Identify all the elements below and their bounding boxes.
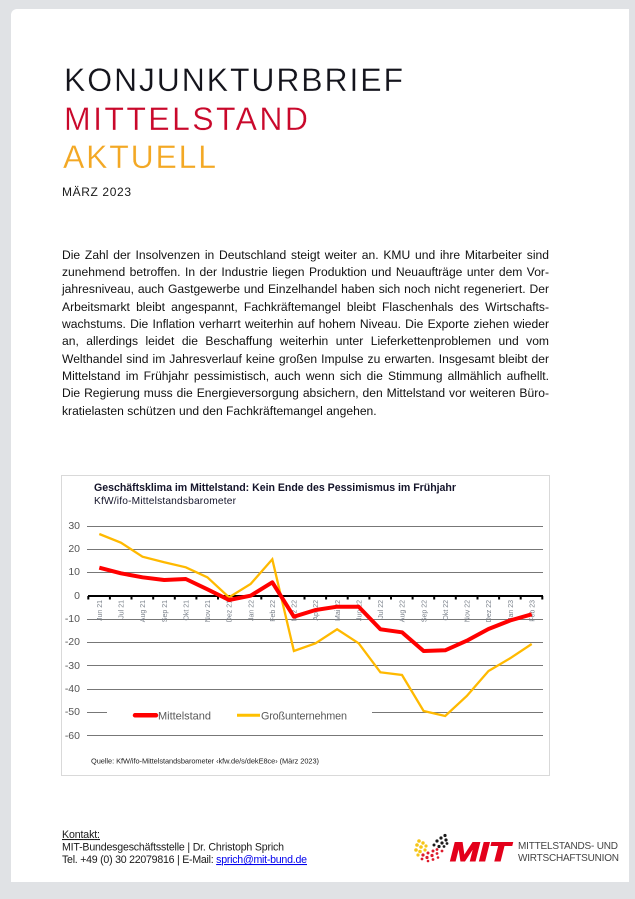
text block: summary: Mittelstand im Frühjahr pessimistisch, auch wenn sich die Stimmung allmählich aufhellt. <box>62 369 549 383</box>
x axis month labels <box>97 600 536 622</box>
text block: summary: Welthandel sind im Jahresverlauf keine großen Impulse zu erwarten. Insgesamt bleibt der <box>62 352 549 366</box>
y axis labels: 20 <box>68 543 80 555</box>
x axis month labels: Nov 21 <box>205 600 212 622</box>
title line: Aktuell: AKTUELL <box>63 139 216 175</box>
x axis month labels: Jan 23 <box>508 600 515 621</box>
y axis labels: 0 <box>74 590 80 602</box>
icon: dots arc <box>414 834 448 862</box>
text block: summary: kratielasten schützen und den Fachkräftemangel angehen. <box>62 404 377 418</box>
legend label: Großunternehmen: Großunternehmen <box>261 710 347 722</box>
x axis month labels: Mrz 22 <box>292 600 299 621</box>
x axis month labels: Jul 22 <box>378 600 385 619</box>
x axis month labels: Aug 21 <box>140 600 147 622</box>
text block: summary <box>62 248 549 418</box>
contact phone and email: Tel. +49 (0) 30 22079816 | E-Mail: sprich@mit-bund.de <box>62 854 307 866</box>
text block: summary: wachstums. Die Inflation verharrt weiterhin auf hohem Niveau. Die Exporte ziehen wieder <box>62 317 549 331</box>
x axis month labels: Okt 21 <box>184 600 190 621</box>
x axis month labels: Mai 22 <box>335 600 342 621</box>
y axis labels <box>65 520 80 742</box>
text block: summary: Arbeitsmarkt bleibt angespannt, Fachkräftemangel bleibt Flaschenhals des Wirtschafts- <box>62 300 549 314</box>
text block: summary: Die Zahl der Insolvenzen in Deutschland steigt weiter an. KMU und ihre Mitarbeiter sind <box>62 248 549 262</box>
y axis labels: -10 <box>65 613 80 625</box>
y axis labels: -40 <box>65 683 80 695</box>
logo wordmark: MIT <box>450 837 513 867</box>
chart title: Geschäftsklima im Mittelstand: Kein Ende des Pessimismus im Frühjahr <box>94 482 456 494</box>
legend key: Großunternehmen <box>237 714 260 717</box>
title line: Konjunkturbrief: KONJUNKTURBRIEF <box>64 62 403 98</box>
chart subtitle: KfW/ifo-Mittelstandsbarometer <box>94 496 237 507</box>
x axis month labels: Sep 22 <box>421 600 428 622</box>
title line: Mittelstand: MITTELSTAND <box>64 101 308 137</box>
line: Großunternehmen <box>99 534 532 716</box>
legend <box>135 710 347 722</box>
y axis labels: -50 <box>65 706 80 718</box>
chart frame <box>62 476 550 776</box>
legend key: Mittelstand <box>135 713 156 718</box>
legend label: Mittelstand: Mittelstand <box>158 710 211 722</box>
y axis labels: -30 <box>65 660 80 672</box>
x axis month labels: Jul 21 <box>119 600 126 619</box>
y axis labels: 10 <box>68 566 80 578</box>
logo organisation name, line 2: WIRTSCHAFTSUNION <box>518 853 619 864</box>
x axis month labels: Okt 22 <box>443 600 450 621</box>
logo organisation name: MITTELSTANDS- UND <box>518 841 618 852</box>
date: MÄRZ 2023 <box>62 185 131 199</box>
source note: Quelle: KfW/ifo-Mittelstandsbarometer ‹kfw.de/s/dekE8ce› (März 2023) <box>91 756 319 766</box>
line: Mittelstand <box>99 568 532 651</box>
x axis month labels: Dez 22 <box>486 600 493 622</box>
x axis month labels: Jan 22 <box>248 600 255 621</box>
y axis labels: 30 <box>68 520 80 532</box>
text block: summary: an, allerdings leidet die Beschaffung weiterhin unter Lieferkettenproblemen und vom <box>62 334 549 348</box>
text block: summary: jahresniveau, auch Gastgewerbe und Einzelhandel haben sich noch nicht regeneriert. Der <box>62 282 549 296</box>
x axis month labels: Jun 21 <box>97 600 104 621</box>
x axis month labels: Nov 22 <box>464 600 472 622</box>
x axis month labels: Jun 22 <box>356 600 363 621</box>
title <box>62 62 403 199</box>
text block: summary: Die Regierung muss die Energieversorgung absichern, den Mittelstand vor weiteren Büro- <box>62 386 549 400</box>
zero axis with ticks <box>88 596 543 600</box>
contact name: MIT-Bundesgeschäftsstelle | Dr. Christoph Sprich <box>62 842 284 854</box>
x axis month labels: Feb 22 <box>270 600 277 622</box>
text block: summary: zunehmend betroffen. In der Industrie liegen Produktion und Neuaufträge unter dem Vor- <box>62 265 549 279</box>
x axis month labels: Aug 22 <box>400 600 407 622</box>
x axis month labels: Apr 22 <box>313 600 320 621</box>
x axis month labels: Feb 23 <box>529 600 536 622</box>
y axis labels: -60 <box>65 730 80 742</box>
contact heading: Kontakt: <box>62 829 100 841</box>
y axis labels: -20 <box>65 636 80 648</box>
x axis month labels: Dez 21 <box>227 600 234 622</box>
x axis month labels: Sep 21 <box>162 600 169 622</box>
